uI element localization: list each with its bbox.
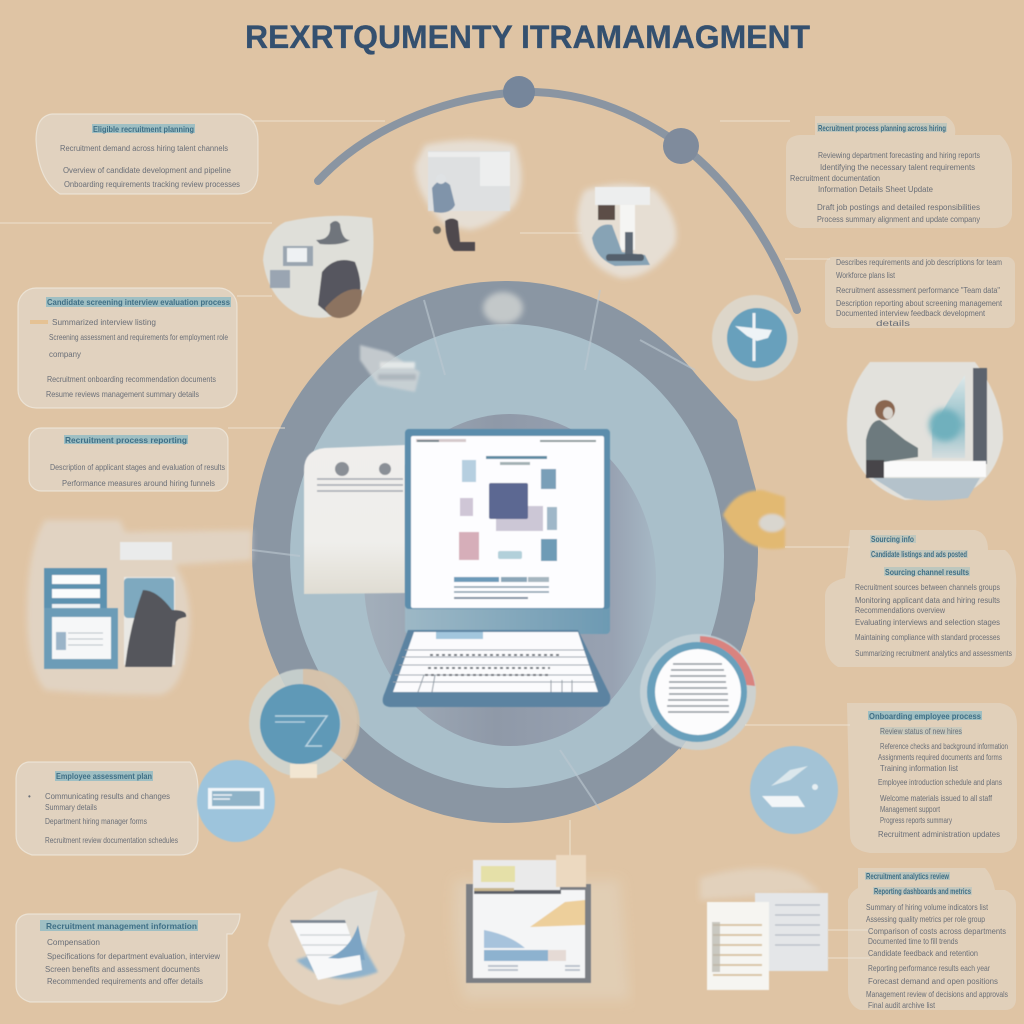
illustration: seated person top right <box>577 184 676 278</box>
panel text: Summarized interview listing <box>52 318 156 327</box>
panel text: Documented time to fill trends <box>868 937 958 946</box>
panel text: Screen benefits and assessment documents <box>45 965 200 974</box>
panel text: Recommended requirements and offer details <box>47 977 203 986</box>
panel text <box>28 792 178 845</box>
panel heading: Recruitment process planning across hiring <box>818 123 946 133</box>
panel: right middle <box>825 530 1016 667</box>
panel text: Candidate feedback and retention <box>868 949 978 958</box>
panel text: Draft job postings and detailed responsibilities <box>817 203 980 212</box>
panel text <box>30 318 228 399</box>
panel text <box>878 742 1008 839</box>
panel text: Description reporting about screening management <box>836 299 1003 308</box>
panel heading: Review status of new hires <box>880 727 962 736</box>
panel text: Reporting performance results each year <box>868 964 990 973</box>
panel text: Specifications for department evaluation, interview <box>47 952 220 961</box>
illustration: dashboard laptop bottom <box>454 855 630 1000</box>
panel text: Describes requirements and job descriptions for team <box>836 258 1002 267</box>
panel text: Reviewing department forecasting and hiring reports <box>818 151 980 160</box>
panel text: Recommendations overview <box>855 606 945 615</box>
panel text: Overview of candidate development and pipeline <box>63 166 232 175</box>
panel text: Employee introduction schedule and plans <box>878 778 1002 787</box>
panel text: Recruitment documentation <box>790 174 880 183</box>
panel text <box>50 463 225 488</box>
panel text: Documented interview feedback development <box>836 309 986 318</box>
panel: bottom left <box>16 914 240 1002</box>
panel heading: Reporting dashboards and metrics <box>874 886 971 896</box>
illustration: documents bottom right <box>700 868 828 990</box>
panel text <box>855 583 1012 658</box>
panel text: Assessing quality metrics per role group <box>866 915 985 924</box>
panel heading: Recruitment management information <box>46 921 197 931</box>
panel heading: Sourcing channel results <box>885 567 969 577</box>
icon: small laptop at ring edge <box>360 345 420 392</box>
panel text: Recruitment review documentation schedules <box>45 836 178 845</box>
panel text: Description of applicant stages and evaluation of results <box>50 463 225 472</box>
panel text: Recruitment assessment performance "Team data" <box>836 286 1000 295</box>
panel text: Evaluating interviews and selection stages <box>855 618 1000 627</box>
panel text: Comparison of costs across departments <box>868 927 1006 936</box>
icon: blue circle right <box>750 746 838 834</box>
panel text: Summary details <box>45 803 97 812</box>
panel text: Recruitment sources between channels groups <box>855 583 1000 592</box>
icon: small cloud at ring top <box>483 292 523 324</box>
connector lines <box>0 121 870 958</box>
panel text: Final audit archive list <box>868 1001 936 1010</box>
illustration: person at screen right <box>847 362 1003 500</box>
panel text <box>836 258 1003 328</box>
panel text: Recruitment demand across hiring talent channels <box>60 144 228 153</box>
panel text: Performance measures around hiring funnels <box>62 479 215 488</box>
icon: blue badge node <box>249 669 360 778</box>
panel text: details <box>876 319 910 328</box>
panel text: Communicating results and changes <box>45 792 170 801</box>
panel text: Compensation <box>47 938 100 947</box>
panel heading: Onboarding employee process <box>869 711 981 721</box>
panel text: company <box>49 350 81 359</box>
panel text: Monitoring applicant data and hiring results <box>855 596 1000 605</box>
panel: left second <box>18 288 237 408</box>
panel text <box>866 903 1008 1010</box>
panel text: Training information list <box>880 764 959 773</box>
panel text: Summary of hiring volume indicators list <box>866 903 989 912</box>
icon: document pie node <box>640 634 756 750</box>
panel text: Resume reviews management summary details <box>46 390 199 399</box>
left white card behind laptop <box>304 445 405 594</box>
panel: bottom right <box>848 868 1016 1010</box>
panel text: Workforce plans list <box>836 271 896 280</box>
panel heading: Recruitment analytics review <box>866 871 949 881</box>
panel text: Management support <box>880 805 941 814</box>
icon: arc node star <box>712 295 798 381</box>
icon: yellow node <box>723 490 785 549</box>
panel heading: Employee assessment plan <box>56 771 152 781</box>
panel: right lower <box>847 703 1017 853</box>
laptop keyboard <box>383 630 610 707</box>
illustration: seated person top <box>415 140 522 251</box>
panel: lower left <box>16 762 198 855</box>
central laptop <box>383 429 610 707</box>
panel heading <box>870 534 970 577</box>
panel text: Process summary alignment and update company <box>817 215 980 224</box>
top arc with nodes <box>318 76 797 310</box>
panel heading: Eligible recruitment planning <box>93 124 194 134</box>
central ring diagram <box>252 281 758 823</box>
panel text <box>790 151 980 224</box>
illustration: tablet bottom centre <box>268 868 405 1005</box>
title: REXRTQUMENTY ITRAMAMAGMENT <box>245 19 810 55</box>
panel text: Screening assessment and requirements for employment role <box>49 333 228 342</box>
panel heading: Candidate listings and ads posted <box>871 549 967 559</box>
panel text: Recruitment administration updates <box>878 830 1000 839</box>
laptop screen <box>405 429 610 634</box>
panel text: Forecast demand and open positions <box>868 977 998 986</box>
panel text: Progress reports summary <box>880 816 952 825</box>
panel: right second <box>825 257 1015 328</box>
panel text: Onboarding requirements tracking review processes <box>64 180 240 189</box>
panel: left third <box>29 428 228 491</box>
panel heading <box>865 871 972 896</box>
panel text: Identifying the necessary talent requirements <box>820 163 975 172</box>
panel text <box>45 938 220 986</box>
panel text: Department hiring manager forms <box>45 817 147 826</box>
panel: top left <box>36 114 258 194</box>
panel text: Recruitment onboarding recommendation documents <box>47 375 216 384</box>
panel text: Maintaining compliance with standard processes <box>855 633 1000 642</box>
illustration: documents and person left <box>27 520 252 695</box>
panel text: Welcome materials issued to all staff <box>880 794 993 803</box>
panel text <box>60 144 240 189</box>
panel heading: Sourcing info <box>871 534 914 544</box>
panel heading <box>868 711 982 736</box>
panel: top right <box>786 116 1012 228</box>
illustration: person with monitor upper left <box>263 216 374 318</box>
panel heading: Recruitment process reporting <box>65 435 187 445</box>
panel text: Information Details Sheet Update <box>818 185 934 194</box>
panel text: • <box>28 792 31 801</box>
panel heading: Candidate screening interview evaluation process <box>47 297 230 307</box>
icon: blue circle with laptop lower left <box>197 760 275 842</box>
